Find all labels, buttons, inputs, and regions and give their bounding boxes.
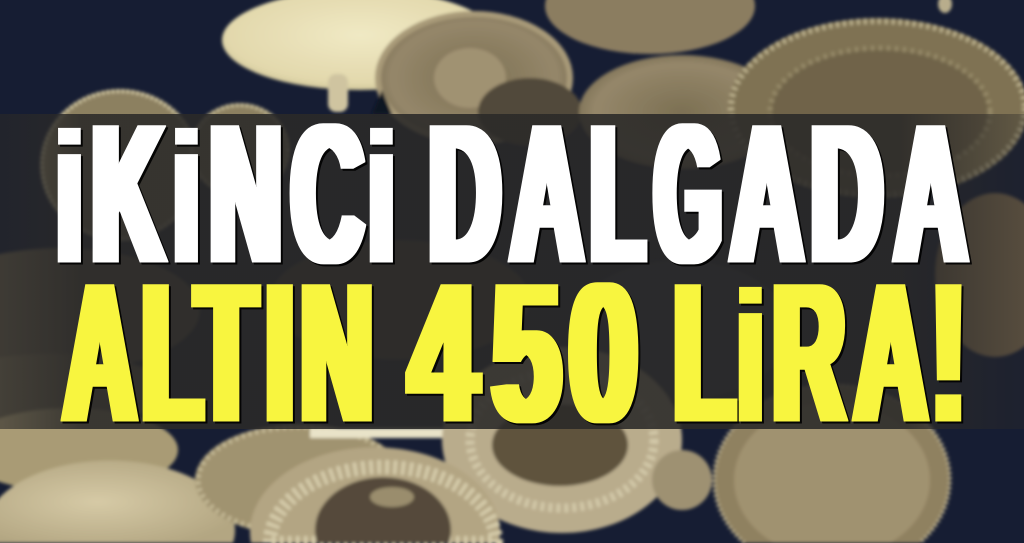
dark banner — [0, 114, 1024, 429]
coin: lower right — [714, 385, 950, 543]
headline line 1: D — [811, 84, 882, 305]
headline line 2: 4 — [409, 242, 477, 463]
coin: lower left back — [0, 408, 178, 492]
headline line 1: İ — [58, 122, 80, 296]
headline line 2: N — [301, 243, 372, 464]
headline line 1: A — [511, 84, 582, 305]
headline line 2: I — [266, 243, 294, 464]
headline line 1: N — [210, 84, 281, 305]
headline line 2 — [64, 242, 965, 464]
coin: small dark — [478, 78, 582, 146]
coin: top centre — [545, 0, 755, 54]
headline line 2: 5 — [492, 242, 561, 463]
headline line 1: D — [429, 84, 500, 305]
coin: pale — [222, 0, 498, 90]
headline line 2: ! — [932, 243, 965, 464]
headline line 1: İ — [176, 122, 197, 296]
headline line 1: G — [655, 84, 721, 305]
coin: centre-left front — [250, 447, 500, 543]
headline line 1: A — [731, 84, 802, 305]
headline line 2: T — [196, 243, 256, 464]
headline line 2: İ — [740, 281, 761, 455]
headline line 1: K — [92, 84, 163, 305]
coin: small left — [40, 89, 200, 241]
pendant loops — [328, 74, 348, 112]
headline line 1: L — [591, 85, 644, 305]
coin: large right — [728, 18, 1024, 198]
headline line 2: A — [855, 243, 926, 464]
coin: centre — [442, 347, 682, 533]
headline line 1: İ — [370, 122, 392, 296]
headline line 1: A — [895, 84, 966, 305]
headline line 2: L — [674, 243, 734, 464]
coin: centre-left back — [195, 424, 405, 536]
coin: centre upper — [376, 12, 572, 144]
fragment — [652, 450, 712, 510]
coin: lower left front — [0, 461, 235, 543]
headline line 2: A — [64, 243, 135, 464]
headline line 2: R — [773, 243, 844, 464]
headline line 2: L — [142, 243, 202, 464]
headline line 2: 0 — [569, 242, 637, 463]
gold coins lower — [0, 347, 950, 543]
gold coins upper — [40, 0, 1024, 241]
coin: right of centre — [579, 55, 785, 169]
gold coins dim middle — [0, 193, 1024, 426]
headline line 1: C — [292, 84, 363, 305]
headline line 1 — [58, 84, 966, 305]
